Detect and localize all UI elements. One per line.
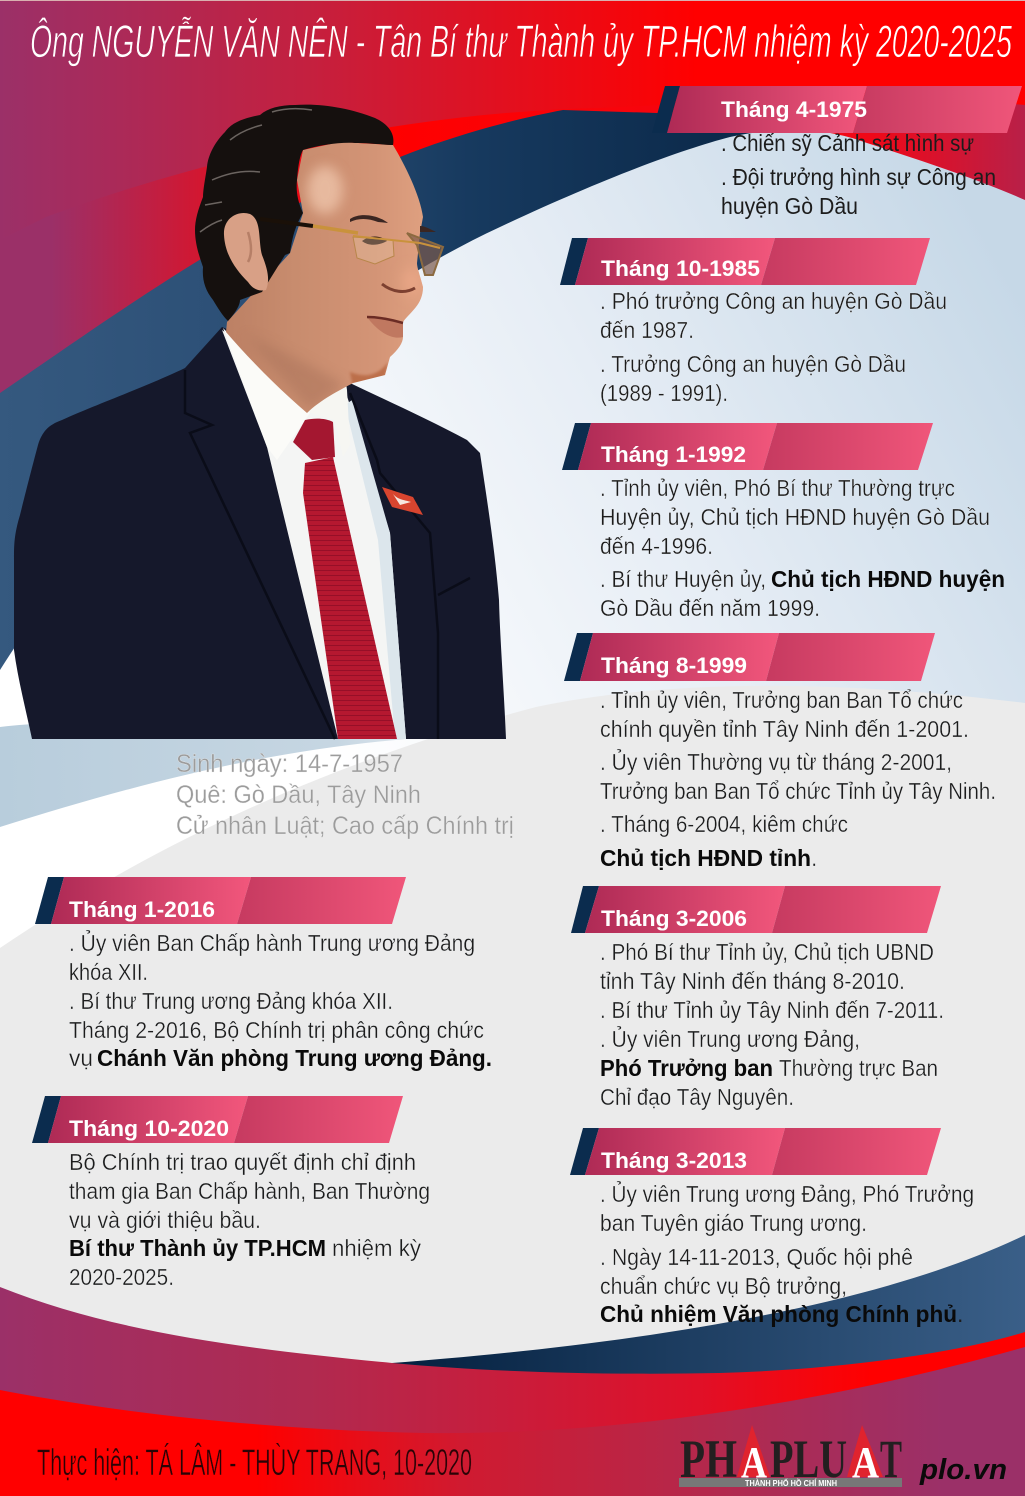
banner	[564, 633, 935, 681]
panel: March 2013: chuẩn chức vụ Bộ trưởng,	[600, 1273, 847, 1299]
suit	[14, 327, 506, 739]
panel: October 2020: nhiệm kỳ	[332, 1235, 421, 1261]
banner	[570, 1128, 941, 1175]
panel: April 1975: huyện Gò Dầu	[721, 193, 858, 219]
panel: January 2016	[35, 877, 492, 1071]
panel: October 1985: . Trưởng Công an huyện Gò Dầu	[600, 351, 906, 377]
banner	[562, 423, 933, 470]
lapel lines	[185, 370, 470, 739]
collar	[223, 328, 310, 460]
panel: October 1985: (1989 - 1991).	[600, 380, 728, 406]
panel: August 1999: . Ủy viên Thường vụ từ tháng 2-2001,	[600, 747, 952, 775]
panel: March 2006: . Phó Bí thư Tỉnh ủy, Chủ tịch UBND	[600, 939, 934, 965]
panel: March 2013: .	[957, 1301, 963, 1327]
panel: August 1999: chính quyền tỉnh Tây Ninh đến 1-2001.	[600, 716, 969, 742]
logo: Pháp Luật: A	[852, 1438, 879, 1487]
banner	[571, 886, 941, 933]
panel: October 2020: tham gia Ban Chấp hành, Ban Thường	[69, 1178, 430, 1204]
logo: Pháp Luật: PLU	[770, 1429, 847, 1489]
ear	[224, 213, 268, 291]
shirt	[222, 330, 406, 739]
panel: August 1999: . Tháng 6-2004, kiêm chức	[600, 811, 848, 837]
panel: January 1992: đến 4-1996.	[600, 533, 713, 559]
panel: March 2006	[571, 886, 944, 1110]
hair	[195, 105, 393, 321]
banner	[35, 877, 406, 924]
panel: January 1992: Chủ tịch HĐND huyện	[771, 566, 1005, 592]
panel: March 2013: . Ngày 14-11-2013, Quốc hội phê	[600, 1244, 913, 1270]
glasses	[260, 219, 443, 275]
panel: August 1999: Chủ tịch HĐND tỉnh	[600, 845, 811, 871]
panel: January 2016: . Ủy viên Ban Chấp hành Trung ương Đảng	[69, 928, 475, 956]
eyebrows, eye, nose, mouth	[350, 215, 388, 223]
banner: Tháng 4-1975	[721, 97, 867, 122]
party pin	[382, 487, 423, 515]
panel: January 1992: . Tỉnh ủy viên, Phó Bí thư Thường trực	[600, 475, 955, 501]
banner	[652, 86, 1022, 133]
banner: Tháng 10-2020	[69, 1116, 229, 1141]
biography: Quê: Gò Dầu, Tây Ninh	[176, 781, 421, 809]
logo: Pháp Luật: PH	[680, 1429, 737, 1489]
banner: Tháng 3-2006	[601, 906, 747, 931]
panel: March 2006: tỉnh Tây Ninh đến tháng 8-2010.	[600, 968, 905, 994]
banner: Tháng 10-1985	[601, 256, 760, 281]
panel: March 2006: Chỉ đạo Tây Nguyên.	[600, 1084, 794, 1110]
panel: October 2020: 2020-2025.	[69, 1264, 174, 1290]
panel: March 2006: Phó Trưởng ban	[600, 1055, 773, 1081]
panel: January 1992	[562, 423, 1005, 621]
panel: October 1985	[560, 238, 947, 406]
panel: January 2016: khóa XII.	[69, 959, 148, 985]
panel: October 2020: Bí thư Thành ủy TP.HCM	[69, 1235, 326, 1261]
logo: Pháp Luật: THÀNH PHỐ HỒ CHÍ MINH	[745, 1478, 837, 1488]
logo: Pháp Luật	[679, 1425, 902, 1489]
banner: Tháng 1-2016	[69, 897, 215, 922]
banner	[560, 238, 930, 285]
panel: January 2016: vụ	[69, 1045, 93, 1071]
logo: Pháp Luật: T	[880, 1429, 902, 1489]
panel: January 2016: Chánh Văn phòng Trung ương Đảng.	[97, 1045, 492, 1071]
panel: April 1975: . Chiến sỹ Cảnh sát hình sự	[721, 130, 974, 156]
panel: March 2006: . Ủy viên Trung ương Đảng,	[600, 1024, 860, 1052]
panel: October 1985: . Phó trưởng Công an huyện Gò Dầu	[600, 288, 947, 314]
banner: Tháng 1-1992	[601, 442, 746, 467]
panel: August 1999	[564, 633, 996, 871]
panel: April 1975: . Đội trưởng hình sự Công an	[721, 164, 996, 190]
neck and face	[220, 140, 430, 420]
website label: plo.vn	[919, 1454, 1007, 1486]
banner: Tháng 3-2013	[601, 1148, 747, 1173]
credit line: Thực hiện: TÁ LÂM - THÙY TRANG, 10-2020	[37, 1442, 472, 1483]
panel: October 2020	[32, 1096, 430, 1290]
panel: October 2020: Bộ Chính trị trao quyết định chỉ định	[69, 1149, 416, 1175]
panel: March 2013	[570, 1128, 974, 1327]
banner	[32, 1096, 403, 1143]
panel: January 1992: . Bí thư Huyện ủy,	[600, 566, 766, 592]
logo: Pháp Luật: A	[741, 1438, 767, 1487]
panel: January 2016: . Bí thư Trung ương Đảng khóa XII.	[69, 988, 393, 1014]
biography	[176, 750, 514, 840]
portrait photo illustration	[14, 105, 506, 739]
panel: March 2013: Chủ nhiệm Văn phòng Chính phủ	[600, 1301, 957, 1327]
panel: August 1999: .	[811, 845, 817, 871]
panel: March 2013: . Ủy viên Trung ương Đảng, Phó Trưởng	[600, 1179, 974, 1207]
panel: March 2006: . Bí thư Tỉnh ủy Tây Ninh đến 7-2011.	[600, 997, 944, 1023]
tie	[293, 419, 335, 460]
banner: Tháng 8-1999	[601, 653, 747, 678]
biography: Sinh ngày: 14-7-1957	[176, 750, 403, 778]
biography: Cử nhân Luật; Cao cấp Chính trị	[176, 812, 514, 840]
panel: March 2006: Thường trực Ban	[779, 1055, 938, 1081]
panel: August 1999: . Tỉnh ủy viên, Trưởng ban Ban Tổ chức	[600, 687, 963, 713]
panel: March 2013: ban Tuyên giáo Trung ương.	[600, 1210, 867, 1236]
panel: January 2016: Tháng 2-2016, Bộ Chính trị phân công chức	[69, 1017, 484, 1043]
panel: January 1992: Huyện ủy, Chủ tịch HĐND huyện Gò Dầu	[600, 504, 990, 530]
panel: April 1975	[652, 86, 1022, 219]
panel: October 1985: đến 1987.	[600, 317, 694, 343]
panel: January 1992: Gò Dầu đến năm 1999.	[600, 595, 820, 621]
panel: October 2020: vụ và giới thiệu bầu.	[69, 1207, 261, 1233]
